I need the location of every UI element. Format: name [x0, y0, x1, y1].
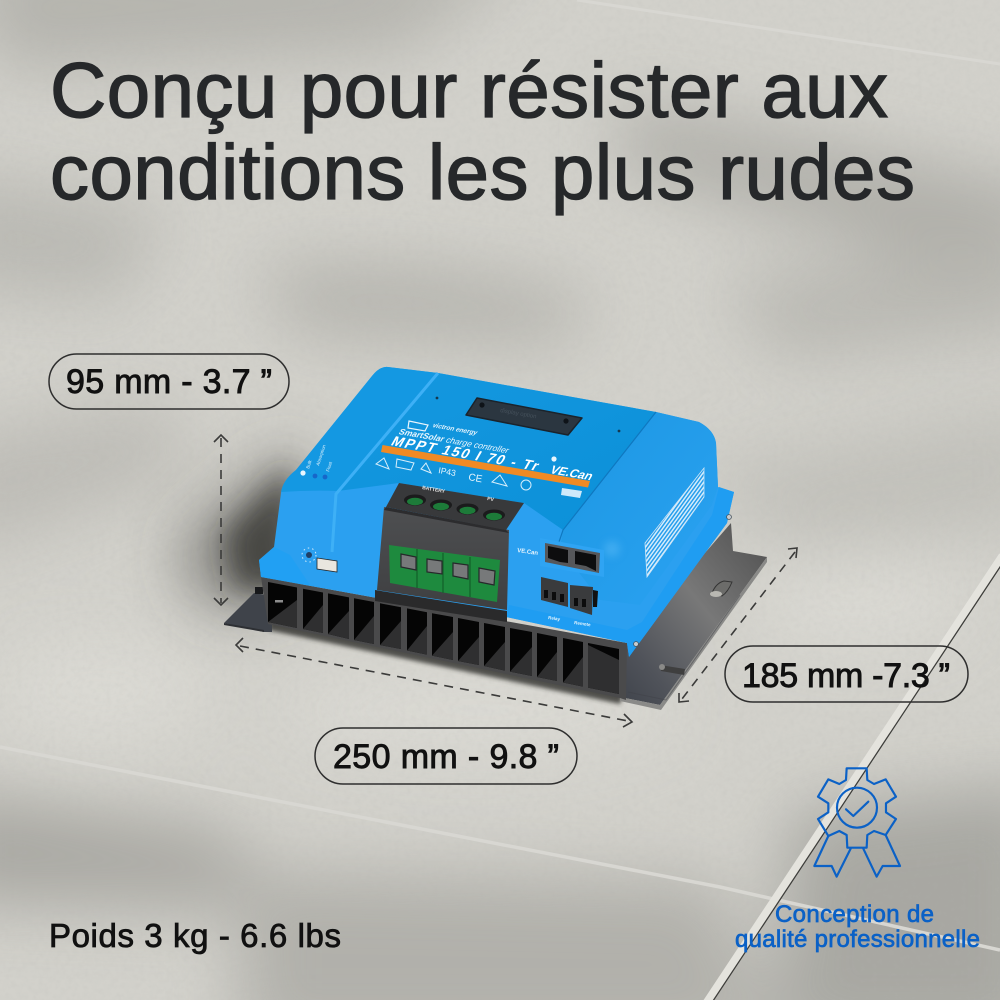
- dimension pill: height: 95 mm - 3.7 ”: [66, 363, 272, 401]
- orange stripe: [381, 445, 590, 488]
- logo and model labels: victron energy: [431, 423, 479, 437]
- VE.Direct port: [302, 548, 337, 572]
- seams: [332, 373, 438, 552]
- device cast shadow: [175, 440, 625, 704]
- heatsink: [261, 577, 627, 700]
- left base plate: [224, 587, 272, 632]
- status LEDs: Bulk: [305, 459, 313, 469]
- VE.Can ports: VE.Can: [517, 548, 539, 557]
- terminal block: [375, 483, 524, 622]
- left shell top: [281, 367, 438, 492]
- lower flanges: [259, 547, 335, 590]
- mounting bolt: [712, 581, 732, 596]
- right base plate and side wall: [620, 523, 767, 710]
- dimension pill: width: [725, 646, 968, 702]
- status LEDs: Absorption: [315, 444, 327, 466]
- VE.Can ports: [517, 538, 604, 577]
- quality caption: qualité professionnelle: [735, 926, 980, 953]
- heatsink cavities: [268, 582, 619, 694]
- QR code: [561, 488, 582, 498]
- relay and remote connectors: Relay: [548, 615, 561, 622]
- dimension pill: length: 250 mm - 9.8 ”: [333, 738, 559, 776]
- logo and model labels: MPPT 150 I 70 - Tr: [388, 434, 542, 474]
- status LEDs: Float: [325, 461, 333, 472]
- status LEDs: [300, 444, 333, 479]
- cavity floor light: [268, 600, 619, 694]
- icon: quality badge gear with ribbons: [814, 768, 900, 877]
- dimension pill: length: [315, 728, 577, 784]
- terminal block: PV: [487, 496, 495, 503]
- quality caption: Conception de: [775, 901, 934, 928]
- dimension pill: width: 185 mm -7.3 ”: [742, 657, 950, 695]
- length dimension arrow: [236, 638, 632, 727]
- right shell panel: [560, 412, 718, 605]
- title: conditions les plus rudes: [50, 128, 915, 216]
- flange screws: [634, 515, 731, 646]
- wire holes: [404, 494, 505, 520]
- central lid: [338, 373, 656, 530]
- weight label: Poids 3 kg - 6.6 lbs: [49, 917, 341, 954]
- side label: [645, 468, 704, 577]
- solar charge controller product: IP43: [438, 465, 457, 478]
- certification marks: [376, 458, 531, 490]
- lower lip: [375, 590, 507, 622]
- display option plate: display option: [500, 408, 537, 420]
- lid screw holes: [436, 397, 620, 432]
- display option plate: [466, 398, 582, 435]
- logo and model labels: VE.Can: [547, 463, 596, 483]
- relay and remote connectors: Remote: [574, 620, 591, 627]
- quality caption: [735, 901, 980, 953]
- blue enclosure: [259, 367, 734, 657]
- width dimension arrow: [679, 548, 797, 702]
- height dimension arrow: [214, 435, 228, 605]
- green connector: [389, 545, 500, 602]
- title: [50, 46, 915, 216]
- dimension pill: height: [49, 354, 289, 409]
- terminal block: BATTERY: [422, 485, 446, 495]
- mounting pin: [660, 665, 685, 675]
- logo and model labels: [388, 421, 596, 483]
- victron logo mark: [408, 421, 428, 431]
- logo and model labels: SmartSolar charge controller: [397, 427, 511, 455]
- front highlight: [604, 541, 620, 557]
- title: Conçu pour résister aux: [50, 46, 888, 134]
- relay and remote connectors: [541, 577, 598, 627]
- solar charge controller product: CE: [467, 472, 483, 485]
- solar charge controller product: [224, 367, 767, 710]
